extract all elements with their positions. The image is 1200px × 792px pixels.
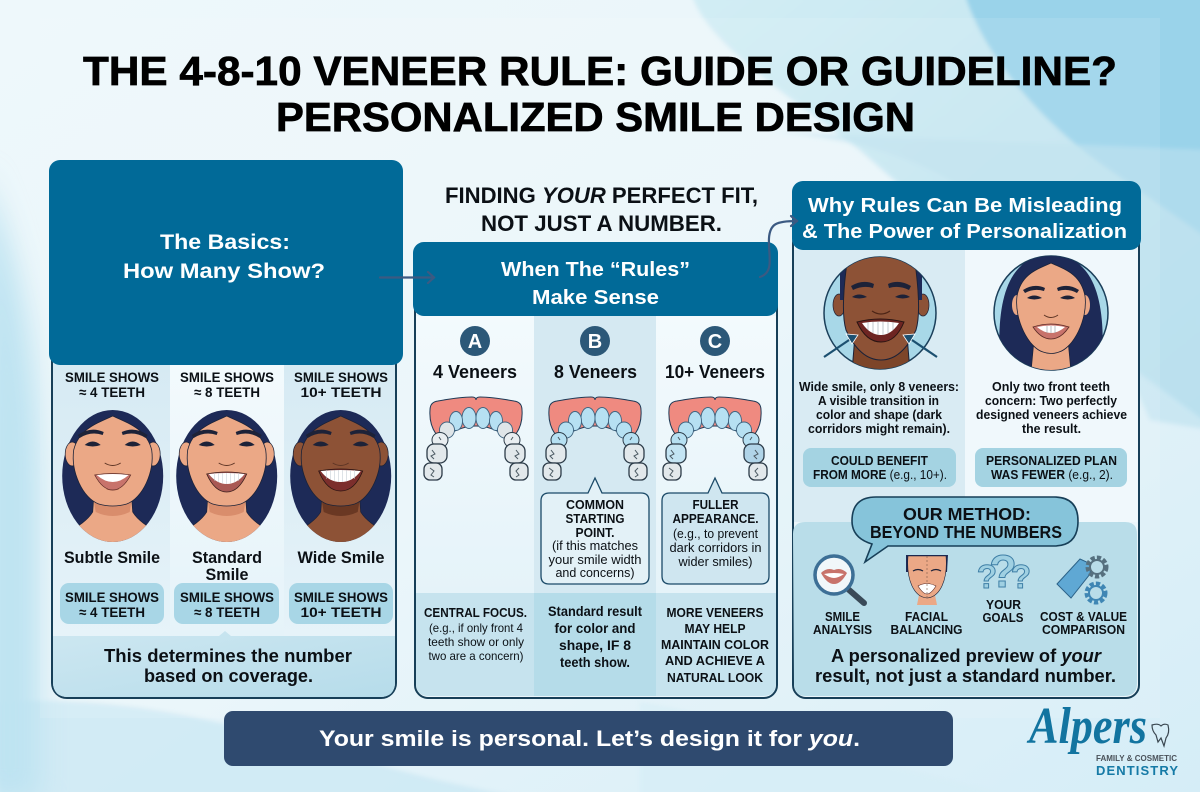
column A: 4 veneers: (e.g., if only front 4: [429, 621, 523, 635]
title: [83, 48, 1117, 140]
header: when the rules make sense: [413, 242, 778, 316]
column: wide smile: 10+ TEETH: [300, 604, 382, 620]
panel: the basics: [52, 345, 396, 698]
face: wide smile: [290, 410, 391, 546]
column B: 8 veneers: teeth show.: [560, 654, 630, 670]
callout: common starting point: [541, 478, 649, 584]
closing statement: [815, 646, 1116, 686]
example: wide smile: A visible transition in: [818, 393, 939, 408]
column: standard smile: ≈ 8 TEETH: [194, 384, 260, 400]
bottom band: rules: [416, 593, 776, 696]
our method section: COST & VALUE: [1040, 610, 1127, 624]
column B: 8 veneers: for color and: [554, 620, 636, 636]
example: only two teeth: the result.: [1022, 421, 1081, 436]
bottom band: basics: This determines the number: [104, 645, 352, 666]
header: the basics: The Basics:: [160, 231, 290, 254]
closing banner: Your smile is personal. Let’s design it for you.: [319, 726, 860, 751]
closing statement: A personalized preview of your: [831, 646, 1102, 666]
icon: question marks: [977, 546, 1031, 597]
example: wide smile: color and shape (dark: [816, 407, 943, 422]
title: PERSONALIZED SMILE DESIGN: [276, 94, 915, 140]
callout: fuller appearance: dark corridors in: [670, 541, 762, 555]
icon: question marks: ?: [1011, 558, 1031, 595]
column A: 4 veneers: [424, 326, 528, 663]
example: wide smile: Wide smile, only 8 veneers:: [799, 379, 959, 394]
column: subtle smile: SMILE SHOWS: [65, 589, 159, 605]
logo: Alpers dentistry: FAMILY & COSMETIC: [1096, 753, 1177, 763]
column: standard smile: Standard: [192, 548, 262, 567]
icon: magnifier with lips: [815, 556, 864, 603]
arrow: rules to why rules: [760, 216, 797, 277]
callout: fuller appearance: (e.g., to prevent: [673, 527, 758, 541]
column A: 4 veneers: 4 Veneers: [433, 362, 517, 382]
icon: question marks: ?: [989, 546, 1017, 597]
column: standard smile: [174, 369, 279, 624]
our method section: GOALS: [982, 611, 1024, 625]
column C: 10+ veneers: [661, 326, 770, 685]
bottom band: basics: based on coverage.: [144, 665, 313, 686]
bottom band: basics: [53, 631, 395, 697]
column B: 8 veneers: Standard result: [548, 603, 642, 619]
column: wide smile: 10+ TEETH: [300, 384, 382, 400]
callout: common starting point: your smile width: [548, 553, 642, 567]
example: wide smile: FROM MORE (e.g., 10+).: [813, 467, 947, 482]
heading: finding your perfect fit: [445, 183, 758, 236]
column C: 10+ veneers: 10+ Veneers: [665, 362, 765, 382]
column: wide smile: SMILE SHOWS: [294, 369, 388, 385]
column: wide smile: Wide Smile: [298, 548, 384, 567]
panel: when the rules make sense: [415, 290, 777, 698]
our method section: BALANCING: [890, 623, 962, 637]
arrow: basics to rules: [380, 272, 434, 283]
our method section: YOUR: [986, 598, 1021, 612]
teeth arch A: [424, 397, 528, 480]
our method section: SMILE: [825, 610, 860, 624]
column B: 8 veneers: [541, 326, 649, 670]
callout: common starting point: and concerns): [556, 566, 634, 580]
closing banner: [224, 711, 953, 766]
icon: tooth: [1152, 724, 1169, 746]
column: wide smile: [289, 369, 393, 624]
icon: price tag and gears: [1057, 558, 1106, 602]
column C: 10+ veneers: NATURAL LOOK: [667, 670, 764, 685]
callout: fuller appearance: [662, 478, 769, 584]
header: when the rules make sense: Make Sense: [532, 287, 659, 309]
header: why rules can be misleading: & The Power of Personalization: [802, 221, 1127, 243]
example: only two teeth: designed veneers achieve: [976, 407, 1127, 422]
speech bubble: our method: OUR METHOD:: [903, 504, 1031, 524]
portrait: woman: [994, 254, 1108, 375]
column A: 4 veneers: teeth show or only: [428, 635, 524, 649]
icon: question marks: ?: [977, 558, 997, 595]
header: why rules can be misleading: [792, 181, 1141, 250]
column C: 10+ veneers: MORE VENEERS: [666, 605, 764, 620]
logo: Alpers dentistry: DENTISTRY: [1096, 763, 1178, 778]
column C: 10+ veneers: C: [708, 331, 722, 353]
face: standard smile: [176, 410, 277, 546]
column backgrounds: why rules: [794, 250, 1138, 522]
example: only two teeth: WAS FEWER (e.g., 2).: [991, 467, 1113, 482]
logo: Alpers dentistry: [1026, 698, 1178, 778]
callout: fuller appearance: APPEARANCE.: [672, 512, 758, 526]
title: THE 4-8-10 VENEER RULE: GUIDE OR GUIDELINE?: [83, 48, 1117, 94]
column: standard smile: SMILE SHOWS: [180, 369, 274, 385]
callout: common starting point: (if this matches: [552, 539, 638, 553]
column C: 10+ veneers: MAY HELP: [684, 621, 746, 636]
column backgrounds: basics: [53, 362, 395, 638]
column C: 10+ veneers: MAINTAIN COLOR: [661, 637, 770, 652]
callout: common starting point: POINT.: [576, 526, 614, 540]
speech bubble: our method: BEYOND THE NUMBERS: [870, 522, 1062, 542]
column A: 4 veneers: CENTRAL FOCUS.: [424, 605, 527, 620]
column B: 8 veneers: shape, IF 8: [559, 637, 631, 653]
example: only two teeth: concern: Two perfectly: [985, 393, 1118, 408]
our method section: FACIAL: [905, 610, 948, 624]
column: standard smile: Smile: [206, 565, 248, 584]
callout: fuller appearance: wider smiles): [677, 555, 752, 569]
column: subtle smile: SMILE SHOWS: [65, 369, 159, 385]
column: wide smile: SMILE SHOWS: [294, 589, 388, 605]
example: wide smile: corridors might remain).: [808, 421, 950, 436]
closing statement: result, not just a standard number.: [815, 666, 1116, 686]
callout: fuller appearance: FULLER: [692, 498, 738, 512]
teeth arch C: [663, 397, 767, 480]
column A: 4 veneers: two are a concern): [428, 649, 524, 663]
callout: common starting point: STARTING: [566, 512, 624, 526]
heading: finding your perfect fit: NOT JUST A NUMBER.: [481, 211, 722, 236]
header: the basics: How Many Show?: [123, 260, 325, 283]
column B: 8 veneers: 8 Veneers: [554, 362, 637, 382]
face: subtle smile: [62, 410, 163, 546]
icon: facial balancing: [906, 555, 948, 605]
column: standard smile: SMILE SHOWS: [180, 589, 274, 605]
teeth arch B: [543, 397, 647, 480]
column: subtle smile: ≈ 4 TEETH: [79, 384, 145, 400]
column B: 8 veneers: B: [588, 331, 602, 353]
callout: common starting point: COMMON: [566, 498, 624, 512]
heading: finding your perfect fit: FINDING YOUR PERFECT FIT,: [445, 183, 758, 208]
our method section: ANALYSIS: [813, 623, 872, 637]
our method section: COMPARISON: [1042, 623, 1125, 637]
column backgrounds: rules: [416, 316, 776, 594]
header: when the rules make sense: When The “Rules”: [501, 259, 690, 281]
column A: 4 veneers: A: [468, 331, 482, 353]
example: only two teeth: Only two front teeth: [992, 379, 1110, 394]
speech bubble: our method: [852, 497, 1078, 562]
portrait: man with arrows: [824, 250, 937, 372]
logo: Alpers dentistry: Alpers: [1026, 698, 1147, 755]
column: standard smile: ≈ 8 TEETH: [194, 604, 260, 620]
column: subtle smile: [60, 369, 164, 624]
header: why rules can be misleading: Why Rules Can Be Misleading: [808, 195, 1122, 217]
panel: why rules can be misleading: [793, 230, 1139, 698]
column: subtle smile: Subtle Smile: [64, 548, 160, 567]
column: subtle smile: ≈ 4 TEETH: [79, 604, 145, 620]
example: wide smile: COULD BENEFIT: [831, 453, 928, 468]
example: only two teeth: [975, 254, 1127, 487]
header: the basics: [49, 160, 403, 365]
example: only two teeth: PERSONALIZED PLAN: [986, 453, 1117, 468]
example: wide smile: [799, 250, 959, 487]
our method section: [793, 497, 1137, 696]
column C: 10+ veneers: AND ACHIEVE A: [665, 653, 766, 668]
